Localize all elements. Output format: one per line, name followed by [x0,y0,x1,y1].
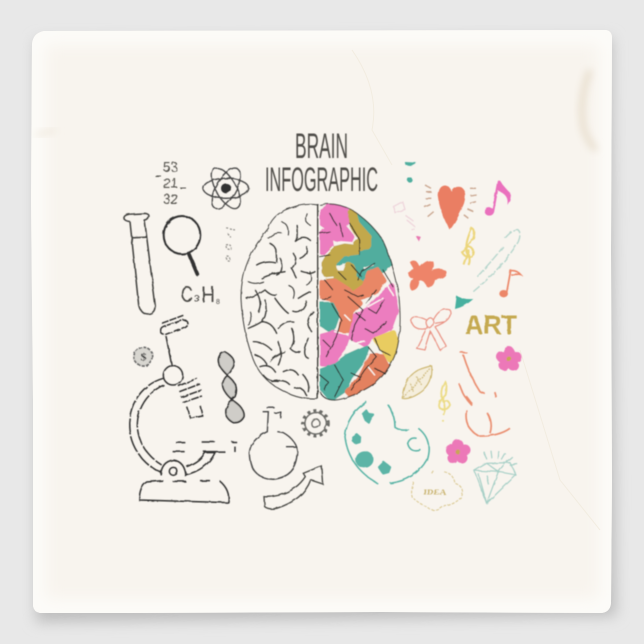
icon: atom [203,164,249,213]
small faded formula [226,228,235,261]
icon: diamond [474,451,518,503]
icon: yellow treble clef [462,228,474,265]
brain: right hemisphere outline and sulci [320,204,400,400]
icon: teal note marks [405,162,417,183]
icon: bow [411,309,451,350]
subtraction sum: 53 [163,159,178,176]
icon: DNA helix [218,352,244,423]
icon: magnifying glass [164,216,200,274]
brain [241,203,400,400]
icon: paint palette [345,402,429,484]
flower upper [496,346,522,370]
icon: idea cloud: IDEA [424,488,447,497]
ART label: ART [465,310,517,340]
icon: violin sketch [459,353,510,436]
subtraction sum [155,159,186,208]
title: BRAIN [295,127,348,166]
flower lower [446,440,470,464]
chemical formula: C [181,282,193,307]
icon: pink flowers [446,346,522,464]
icon: test tube [124,213,155,314]
icon: heart with rays [424,185,477,230]
chemical formula: H [201,282,215,307]
microscope eyepiece [161,315,187,335]
icon: paintbrush [455,230,520,309]
icon: paint splat [408,260,447,291]
icon: leaf [402,366,432,399]
icon: curved arrow [264,466,323,509]
brain: coloured right hemisphere [320,203,400,400]
icon: pink music note [485,181,511,216]
icon: coin [134,347,153,366]
icon: coin: $ [140,352,146,364]
icon: gear [303,411,328,436]
icon: round flask [249,408,298,479]
title [265,127,378,199]
icon: faded pink marks [393,202,415,230]
icon: idea cloud [411,471,462,510]
palette paint spots [363,411,373,422]
chemical formula [181,282,220,307]
brain: white speckle highlights [323,242,393,375]
icon: orange music note [499,271,521,297]
subtraction sum: 21 [163,175,178,192]
chemical formula: 8 [216,299,220,306]
chemical formula: 3 [194,294,200,305]
subtraction sum: 32 [163,191,178,208]
icon: pink drop [416,236,421,242]
icon: microscope [129,315,237,503]
text: INFOGRAPHIC [265,161,378,199]
icon: yellow treble clef lower [439,382,450,422]
brain: left hemisphere outline and sulci [241,204,318,399]
